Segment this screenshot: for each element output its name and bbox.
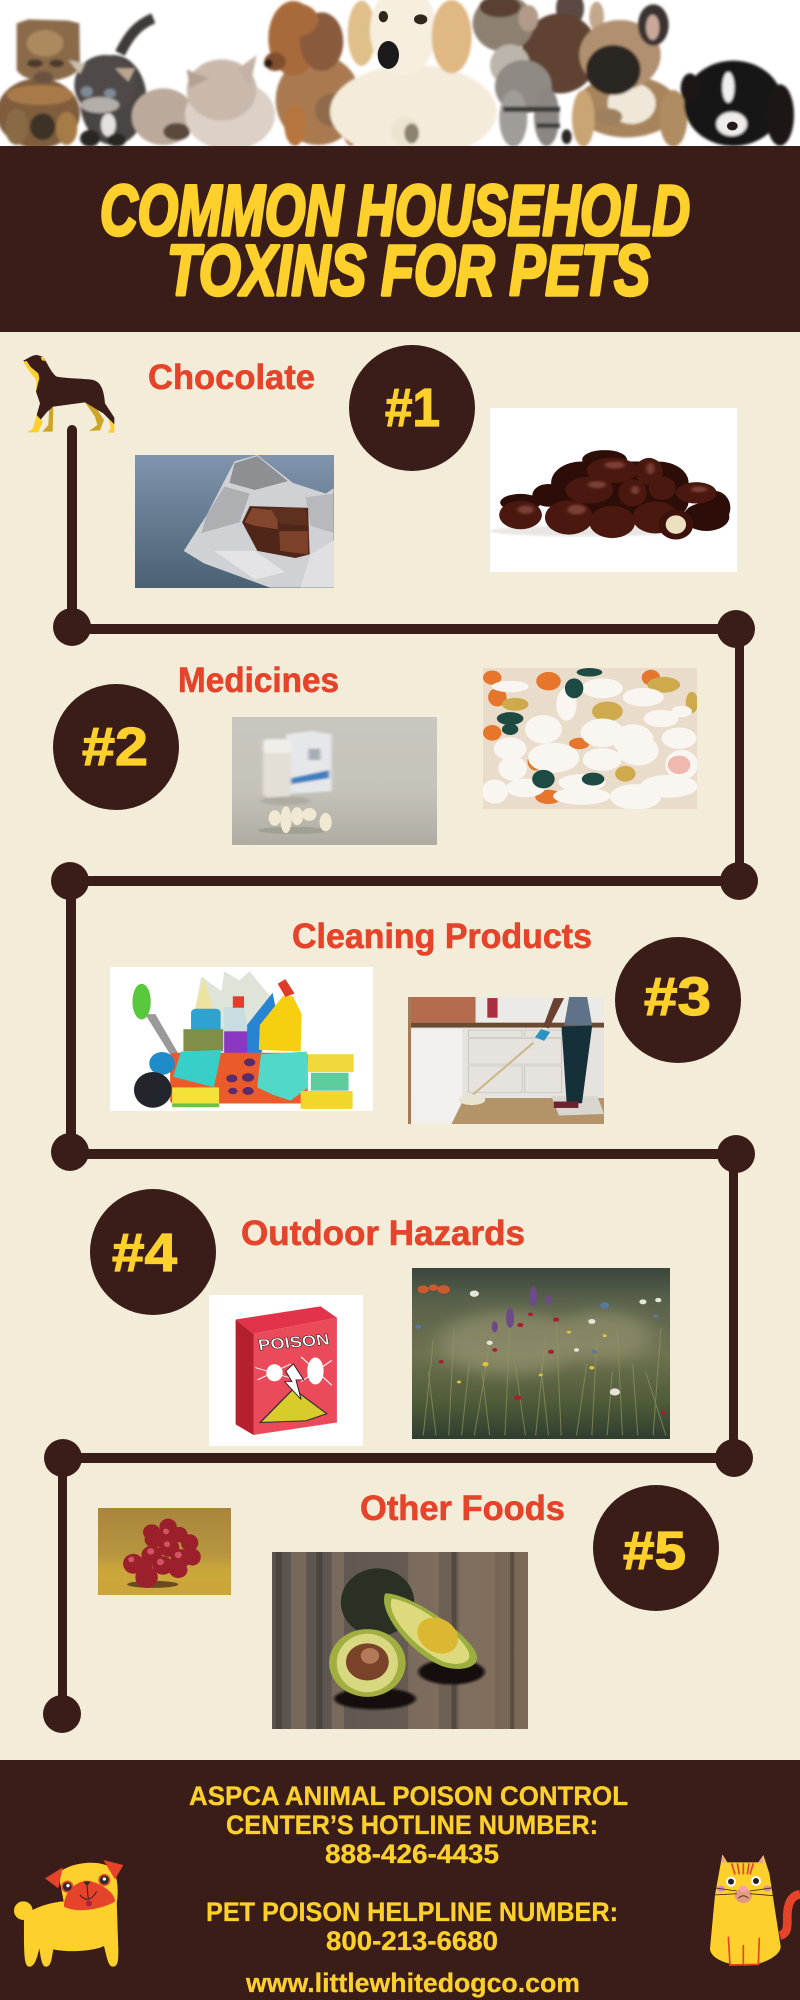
hotline text: 888-426-4435 — [325, 1839, 499, 1869]
photo: medicine bottle and capsules — [232, 717, 437, 845]
photo: box of poison — [209, 1295, 363, 1446]
badge #3: #3 — [644, 967, 711, 1027]
heading: chocolate: Chocolate — [148, 358, 315, 397]
title banner — [0, 146, 800, 332]
badge #2 — [53, 684, 179, 810]
hotline text: CENTER’S HOTLINE NUMBER: — [226, 1810, 598, 1840]
badge #2: #2 — [82, 717, 148, 777]
heading: medicines: Medicines — [178, 661, 339, 700]
heading: other foods: Other Foods — [360, 1489, 565, 1528]
photo: wildflower meadow — [412, 1268, 670, 1439]
badge #3 — [615, 937, 741, 1063]
photo: person mopping a kitchen floor — [408, 997, 604, 1124]
badge #1 — [349, 345, 475, 471]
icon: yellow cat — [710, 1854, 800, 1966]
hotline text: ASPCA ANIMAL POISON CONTROL — [189, 1781, 628, 1811]
title — [100, 172, 690, 311]
photo: bunch of red grapes — [98, 1508, 231, 1595]
badge #4: #4 — [112, 1223, 177, 1283]
hotline text — [189, 1781, 628, 1998]
photo: chocolate covered beans — [490, 408, 737, 572]
heading: cleaning products: Cleaning Products — [292, 917, 592, 956]
badge #4 — [90, 1189, 216, 1315]
title: TOXINS FOR PETS — [167, 232, 650, 311]
photo: avocado halves on wood — [272, 1552, 528, 1729]
photo: chocolate bar in foil — [135, 455, 334, 588]
hotline text: 800-213-6680 — [326, 1926, 498, 1956]
photo: heap of pills — [483, 668, 697, 809]
badge #5 — [593, 1485, 719, 1611]
photo: box of poison: POISON — [257, 1331, 331, 1354]
badge #5: #5 — [623, 1521, 686, 1581]
photo: cleaning supplies basket — [110, 967, 373, 1111]
winding path connecting the five sections — [43, 425, 758, 1733]
footer panel — [0, 1760, 800, 2000]
heading: outdoor hazards: Outdoor Hazards — [241, 1214, 525, 1253]
icon: rottweiler dog at start of path — [23, 355, 114, 433]
icon: yellow pug — [14, 1860, 124, 1967]
badge #1: #1 — [385, 378, 440, 438]
header photo: row of puppies and kittens — [0, 0, 800, 146]
hotline text: PET POISON HELPLINE NUMBER: — [206, 1897, 618, 1927]
hotline text: www.littlewhitedogco.com — [245, 1968, 580, 1998]
